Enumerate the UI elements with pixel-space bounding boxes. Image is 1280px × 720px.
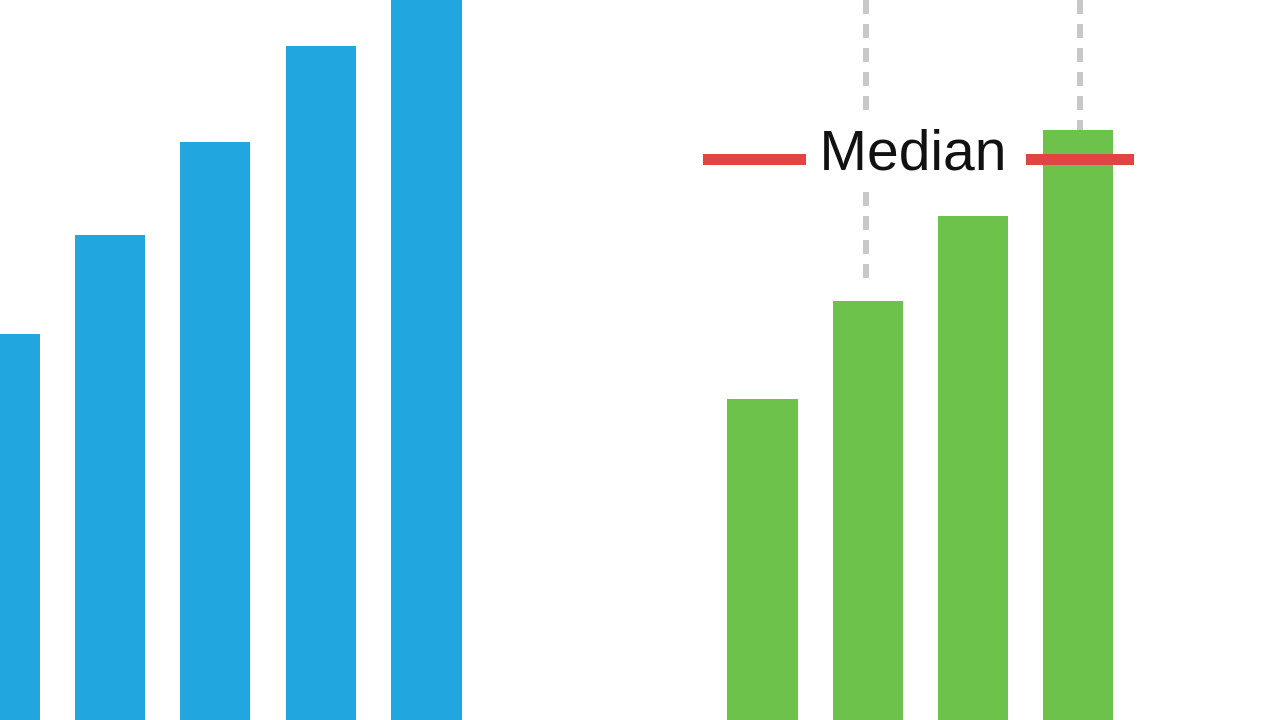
median label: Median — [820, 119, 1006, 183]
blue bar group — [0, 0, 462, 720]
dashed guide lines — [866, 0, 1080, 285]
green bar group — [727, 130, 1113, 720]
median line — [703, 154, 1134, 165]
